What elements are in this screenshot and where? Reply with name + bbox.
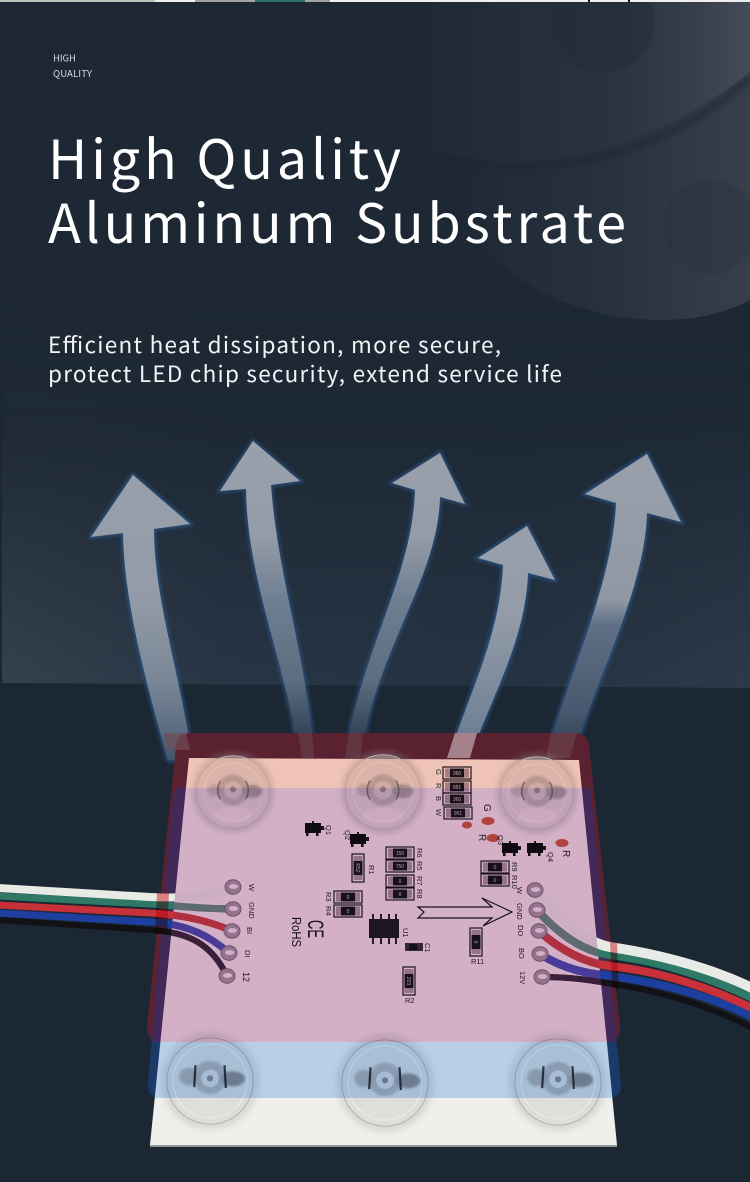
PCB labels: G <box>481 804 492 812</box>
solder dots <box>462 817 568 847</box>
PCB labels: R6 <box>415 848 424 858</box>
PCB labels: DO <box>516 925 525 936</box>
arrow 1 <box>91 475 192 760</box>
red wire <box>0 905 232 931</box>
resistor values: 360 <box>453 797 461 803</box>
top strip of previous image <box>0 0 750 2</box>
arrow 5 <box>546 454 681 760</box>
small label: HIGH QUALITY <box>53 50 93 80</box>
PCB labels: BO <box>517 948 526 959</box>
PCB labels: R4 <box>324 906 333 916</box>
PCB labels: R <box>476 834 487 841</box>
resistor values: 0 <box>347 909 350 915</box>
overlap of red and blue <box>152 788 616 1042</box>
LED lenses <box>162 750 606 1131</box>
PCB labels: U1 <box>401 928 410 938</box>
resistor values: 951 <box>454 811 462 817</box>
lens top middle <box>341 750 425 834</box>
RoHS mark: RoHS <box>289 917 304 947</box>
CE mark: CE <box>303 920 328 938</box>
resistor values: 360 <box>453 771 461 777</box>
lens bottom right <box>510 1034 606 1130</box>
right cable <box>535 890 750 1028</box>
PCB labels: R1 <box>367 865 376 875</box>
heat arrows <box>91 441 681 765</box>
PCB labels: W <box>515 887 524 895</box>
PCB components <box>241 767 571 1005</box>
background panel <box>2 492 750 688</box>
green wire <box>0 896 233 909</box>
lens bottom middle <box>337 1035 433 1131</box>
PCB labels: 12V <box>518 971 527 984</box>
black wire <box>542 977 750 1028</box>
PCB labels: C1 <box>423 943 432 953</box>
PCB labels: W <box>434 809 443 817</box>
PCB labels: R3 <box>324 892 333 902</box>
blue zone <box>148 788 621 1098</box>
PCB labels: R7 <box>415 876 424 886</box>
white wire <box>535 890 750 988</box>
cable tint left <box>155 893 169 934</box>
resistors top right <box>443 767 472 819</box>
colour overlay: blue band <box>155 1042 612 1098</box>
PCB labels: Q3 <box>496 835 505 845</box>
title: High Quality <box>48 116 401 195</box>
green wire <box>537 910 750 998</box>
small label: HIGH QUALITY: HIGH <box>53 50 76 64</box>
description <box>48 328 562 389</box>
PCB labels: B <box>434 796 443 801</box>
PCB labels: Q4 <box>546 852 555 862</box>
PCB direction arrow <box>418 898 512 926</box>
PCB labels: Q1 <box>324 825 333 835</box>
resistor values: 0 <box>399 879 402 885</box>
resistor values: 150 <box>396 851 404 857</box>
colour overlay on the board <box>186 758 582 788</box>
PCB labels: 12 <box>241 972 251 982</box>
PCB labels <box>241 769 571 1005</box>
resistor values: 0 <box>347 895 350 901</box>
black wire <box>0 920 227 976</box>
PCB labels: BI <box>245 927 254 934</box>
resistor values: 951 <box>453 785 461 791</box>
lens top right <box>496 752 578 834</box>
resistor values: 0 <box>472 941 478 944</box>
PCB labels: R8 <box>415 889 424 899</box>
PCB labels: R10 <box>510 875 519 889</box>
resistor values <box>347 771 497 985</box>
PCB labels: R2 <box>405 996 415 1005</box>
resistor values: R52 <box>354 863 360 873</box>
blue wire <box>540 954 750 1017</box>
resistor values: 750 <box>396 864 404 870</box>
PCB labels: R11 <box>471 957 484 966</box>
PCB labels: R <box>560 850 571 857</box>
arrow 4 <box>447 526 555 765</box>
connection pads <box>219 880 550 984</box>
resistor values: 203 <box>405 977 411 985</box>
transistors <box>305 821 546 856</box>
PCB labels: R9 <box>510 862 519 872</box>
description: Efficient heat dissipation, more secure, <box>48 328 501 360</box>
white wire <box>0 887 233 898</box>
title <box>48 116 626 259</box>
decorative round shapes top right <box>534 2 750 320</box>
PCB labels: G <box>434 769 443 775</box>
arrow 2 <box>220 441 314 760</box>
red wire <box>539 931 750 1008</box>
LED module board <box>150 758 617 1147</box>
PCB labels: GND <box>515 903 524 920</box>
blue wire <box>0 913 229 953</box>
PCB labels: W <box>247 884 256 892</box>
lens top left <box>192 751 274 833</box>
title: Aluminum Substrate <box>48 180 626 259</box>
resistor values: 0 <box>494 878 497 884</box>
resistor values: 0 <box>399 892 402 898</box>
colour overlay: middle band <box>160 788 607 1042</box>
cable tint right <box>610 942 619 990</box>
wires seen through the translucent board overlay <box>171 902 602 986</box>
small label: HIGH QUALITY: QUALITY <box>53 66 93 80</box>
IC chip <box>369 914 399 944</box>
description: protect LED chip security, extend service life <box>48 357 562 389</box>
PCB labels: R <box>434 783 443 789</box>
left cable <box>0 887 233 976</box>
red zone <box>147 733 620 1042</box>
PCB labels: R5 <box>415 861 424 871</box>
arrow 3 <box>345 453 465 760</box>
resistors centre <box>334 847 509 995</box>
PCB labels: GND <box>247 902 256 919</box>
resistor values: 0 <box>494 865 497 871</box>
capacitor C1 <box>405 943 423 951</box>
arrow streaks over red zone <box>163 733 577 758</box>
red and blue heat zones behind the module <box>147 733 621 1098</box>
lens bottom left <box>162 1033 258 1129</box>
PCB labels: Q2 <box>343 830 352 840</box>
PCB labels: DI <box>243 950 252 958</box>
